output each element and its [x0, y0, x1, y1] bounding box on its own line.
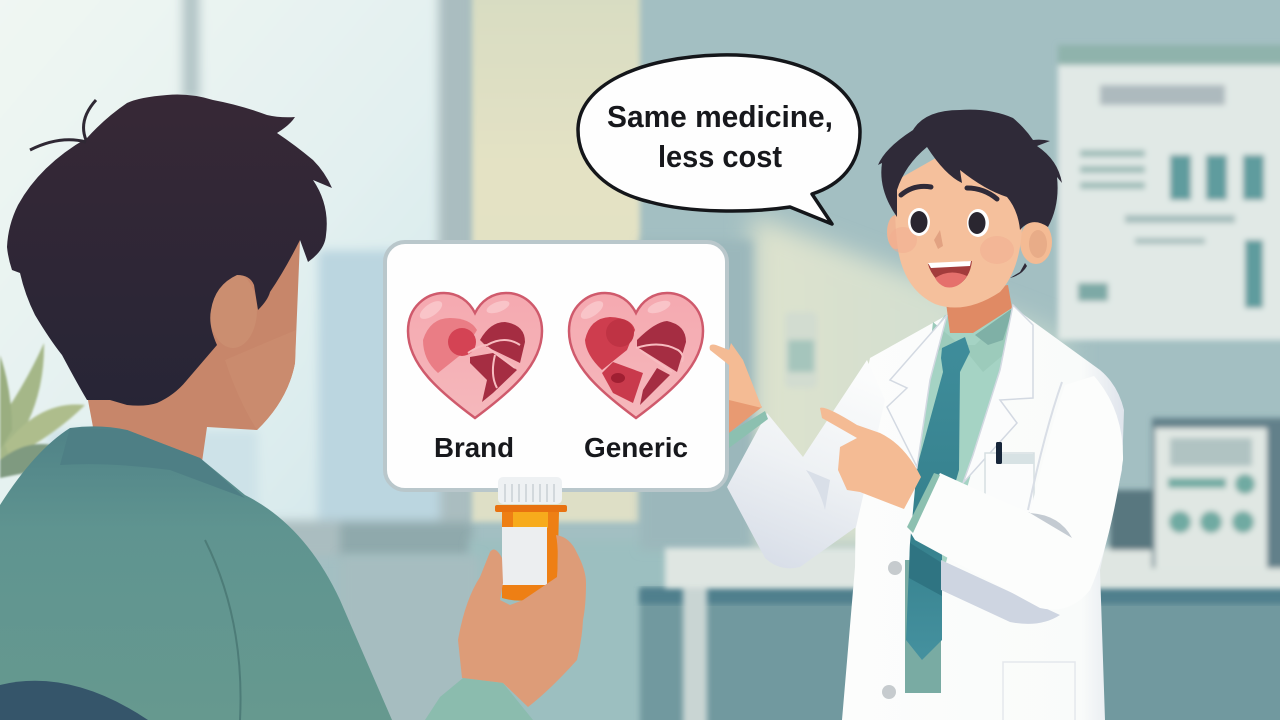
bottle cap [498, 477, 562, 504]
label: Brand: Brand [434, 432, 514, 463]
plant [0, 343, 85, 478]
icon: generic heart [569, 293, 703, 418]
doctor's hand holding card [710, 343, 768, 448]
bottle label [502, 527, 547, 585]
cheeks [889, 227, 917, 253]
sleeve cuff right [907, 473, 940, 533]
jacket seam [205, 540, 241, 720]
sleeve cuff [425, 678, 533, 720]
hand [458, 535, 586, 707]
mouth [928, 261, 972, 287]
left ear [887, 215, 905, 249]
bubble text line 1: Same medicine, [607, 99, 833, 134]
hair [7, 95, 332, 406]
nose [934, 230, 943, 249]
brows [901, 186, 931, 195]
bubble text line 2: less cost [658, 139, 782, 174]
pointing hand [820, 408, 921, 509]
speech bubble [578, 55, 860, 224]
pocket and pen [985, 442, 1034, 513]
lab coat back body [842, 307, 1124, 720]
patient [0, 95, 392, 720]
tie [906, 337, 970, 660]
lower cabinet [640, 588, 1280, 720]
sleeve fold [806, 470, 830, 510]
jacket [0, 426, 392, 720]
tie shadow [909, 543, 942, 596]
amber bottle body [495, 505, 567, 512]
left lapel [887, 315, 947, 467]
wall dispenser [785, 312, 817, 388]
lower wall [470, 540, 670, 720]
cheek plane [225, 330, 296, 430]
head [878, 110, 1062, 308]
right ear [1020, 220, 1052, 264]
jacket collar [60, 428, 245, 498]
trousers [905, 690, 941, 720]
face [895, 150, 1022, 308]
neck [945, 285, 1012, 333]
eyes [908, 208, 930, 236]
sunlit wall [752, 215, 1070, 548]
chair [0, 681, 148, 720]
shirt [905, 305, 1012, 693]
icon: brand heart [408, 293, 542, 418]
right sleeve [907, 376, 1123, 610]
ear [209, 272, 257, 348]
hair [878, 110, 1062, 230]
comparison card [385, 242, 727, 490]
left sleeve [727, 360, 885, 568]
desk [665, 418, 1280, 720]
neck and face [87, 240, 300, 462]
window [0, 0, 472, 556]
lower pocket [1003, 662, 1075, 720]
label: Generic: Generic [584, 432, 688, 463]
coat buttons [888, 561, 902, 575]
coat shadow beneath sleeve [941, 560, 1060, 624]
right lapel [963, 305, 1033, 483]
wall poster [1058, 45, 1280, 340]
pill bottle in hand [425, 477, 586, 720]
cream wall panel [472, 0, 640, 522]
doctor [727, 110, 1124, 720]
